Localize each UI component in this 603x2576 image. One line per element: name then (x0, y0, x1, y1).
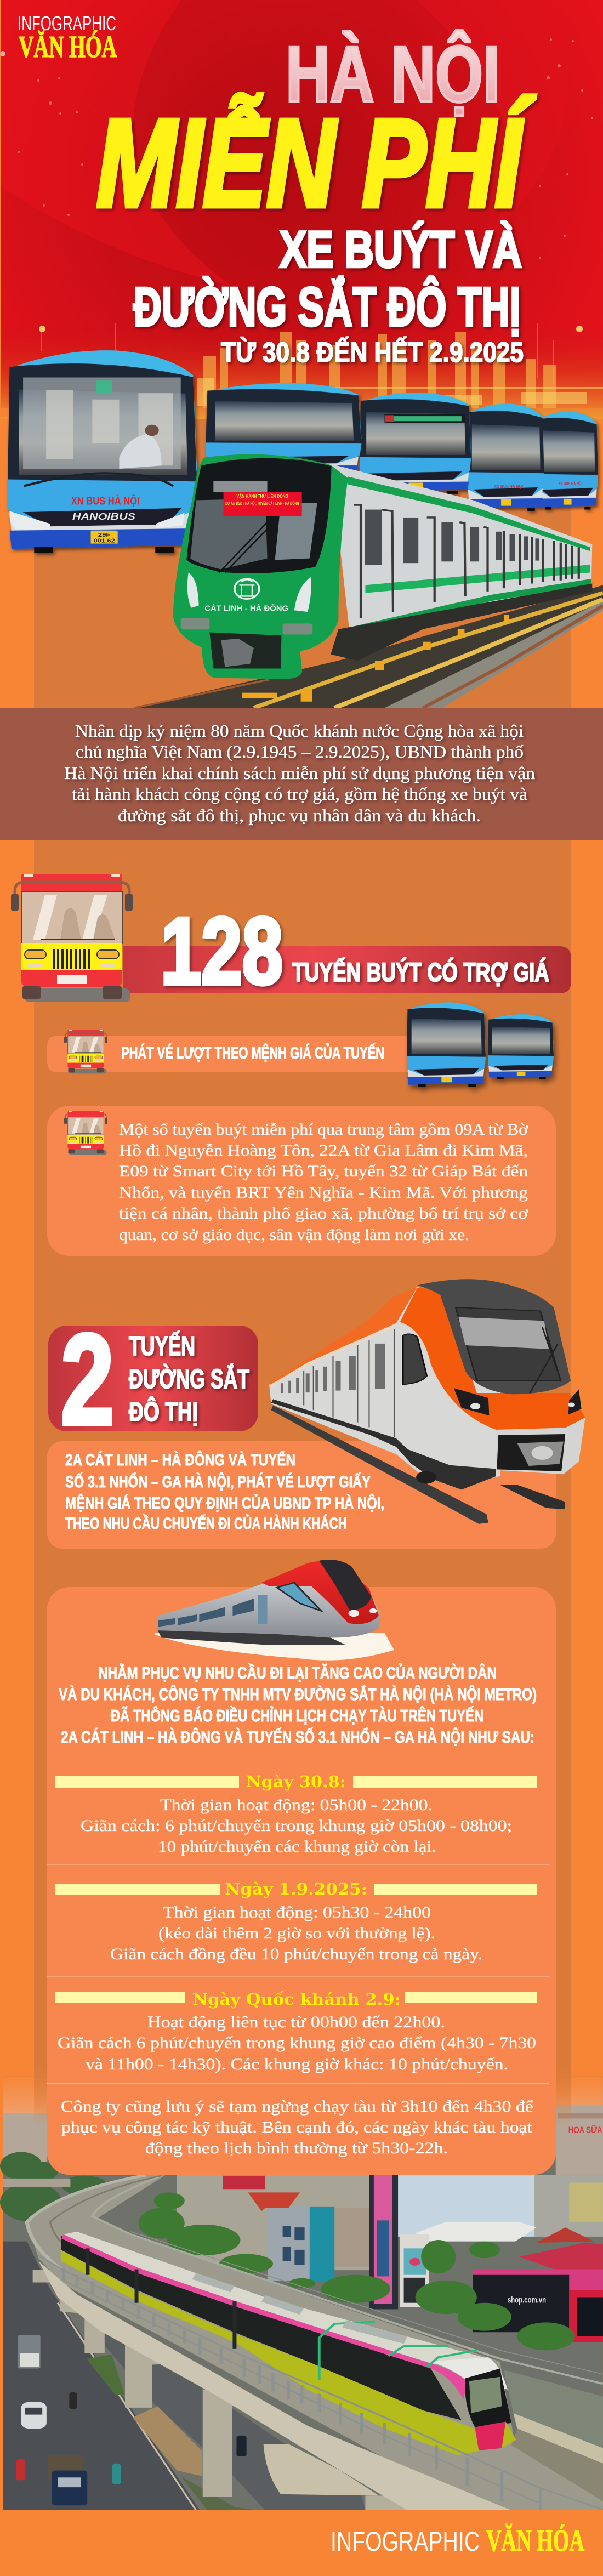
panel: free bus routes: Nhổn, và tuyến BRT Yên Nghĩa - Kim Mã. Với phương (119, 1184, 528, 1202)
panel: ticket note (47, 1030, 428, 1073)
illustration: orange metro train (269, 1279, 585, 1524)
panel: metro lines description: MỆNH GIÁ THEO QUY ĐỊNH CỦA UBND TP HÀ NỘI, (65, 1494, 384, 1512)
badge: 2 metro lines: ĐÔ THỊ (129, 1397, 198, 1427)
subtitle: date range: TỪ 30.8 ĐẾN HẾT 2.9.2025 (221, 336, 524, 368)
hero photo: blue buses: XN BUS HÀ NỘI (559, 481, 582, 486)
hero photo: rail track (135, 585, 603, 708)
intro panel: Nhân dịp kỷ niệm 80 năm Quốc khánh nước Cộng hòa xã hội (75, 721, 524, 741)
yellow and pink metro train (61, 2232, 516, 2455)
intro panel: Hà Nội triển khai chính sách miễn phí sử dụng phương tiện vận (64, 763, 535, 783)
panel: metro lines description (47, 1441, 556, 1549)
panel: free bus routes (47, 1106, 556, 1256)
intro panel: đường sắt đô thị, phục vụ nhân dân và du khách. (118, 805, 481, 825)
schedule: 1.9.2025 (55, 1880, 537, 1963)
panel: metro lines description: 2A CÁT LINH – HÀ ĐÔNG VÀ TUYẾN (65, 1451, 295, 1469)
photo: Hanoi metro on elevated viaduct (0, 2077, 603, 2510)
railing (38, 2255, 603, 2510)
hero photo: green metro train: DỰ ÁN ĐSĐT HÀ NỘI, TUYẾN CÁT LINH - HÀ ĐÔNG (225, 501, 299, 506)
illustration: red metro train (154, 1560, 394, 1661)
schedule: 1.9.2025: Thời gian hoạt động: 05h30 - 24h00 (163, 1903, 431, 1921)
schedule: National Day: Ngày Quốc khánh 2.9: (192, 1990, 401, 2009)
schedule: 30.8 (55, 1772, 537, 1856)
hero photo: blue buses (8, 350, 598, 553)
panel: free bus routes: E09 từ Smart City tới Hồ Tây, tuyến 32 từ Giáp Bát đến (119, 1162, 528, 1180)
inner column (34, 384, 571, 2127)
schedule: National Day (55, 1990, 537, 2073)
road and vehicles (3, 2242, 365, 2510)
hero photo: blue buses: HANOIBUS (72, 512, 135, 522)
hero photo: green metro train: VẬN HÀNH THỬ LIÊN ĐỘNG (236, 493, 288, 499)
banner: 128 bus routes (123, 899, 571, 1004)
panel: free bus routes: quan, cơ sở giáo dục, sân vận động làm nơi gửi xe. (119, 1226, 469, 1244)
schedule: 1.9.2025: Giãn cách đồng đều 10 phút/chuyến trong cả ngày. (110, 1945, 482, 1963)
schedule: National Day: và 11h00 - 14h30). Các khung giờ khác: 10 phút/chuyến. (86, 2055, 508, 2073)
hero photo: blue buses: XN BUS HÀ NỘI (494, 484, 523, 490)
logo: Infographic Văn Hóa: INFOGRAPHIC (18, 12, 116, 35)
photo: two blue buses (407, 1002, 554, 1087)
schedule: 30.8: Giãn cách: 6 phút/chuyến trong khung giờ 05h00 - 08h00; (81, 1817, 512, 1835)
footer bar (0, 2510, 603, 2576)
badge: 2 metro lines (48, 1307, 258, 1452)
panel: metro lines description: SỐ 3.1 NHỔN – GA HÀ NỘI, PHÁT VÉ LƯỢT GIẤY (65, 1472, 371, 1491)
schedule: 1.9.2025: Ngày 1.9.2025: (225, 1880, 367, 1898)
footer logo: INFOGRAPHIC (331, 2526, 480, 2557)
panel: ticket note: PHÁT VÉ LƯỢT THEO MỆNH GIÁ CỦA TUYẾN (121, 1043, 384, 1062)
city skyline (0, 323, 603, 419)
hero photo: blue buses: XN BUS HÀ NỘI (71, 494, 140, 507)
schedule: 1.9.2025: (kéo dài thêm 2 giờ so với thường lệ). (158, 1924, 435, 1942)
panel: metro lines description: THEO NHU CẦU CHUYẾN ĐI CỦA HÀNH KHÁCH (65, 1514, 347, 1533)
intro panel: chủ nghĩa Việt Nam (2.9.1945 – 2.9.2025), UBND thành phố (76, 742, 524, 761)
title: Hà Nội: HÀ NỘI (286, 30, 500, 118)
schedule: 30.8: Ngày 30.8: (246, 1772, 346, 1791)
schedule: technical note: Công ty cũng lưu ý sẽ tạm ngừng chạy tàu từ 3h10 đến 4h30 để (61, 2097, 534, 2116)
panel: free bus routes: Một số tuyến buýt miễn phí qua trung tâm gồm 09A từ Bờ (119, 1121, 528, 1139)
logo: Infographic Văn Hóa (18, 12, 117, 64)
schedule intro text (59, 1663, 537, 1747)
schedule: technical note: động theo lịch bình thường từ 5h30-22h. (145, 2139, 448, 2157)
hero photo: blue buses: 001.62 (93, 538, 115, 544)
banner: 128 bus routes: 128 (161, 899, 283, 1004)
piers (33, 2270, 408, 2510)
footer logo (331, 2523, 584, 2558)
schedule: National Day: Hoạt động liên tục từ 00h00 đến 22h00. (147, 2013, 445, 2031)
panel: metro schedule (47, 1587, 556, 2175)
hero background (0, 0, 603, 408)
schedule: 30.8: 10 phút/chuyến các khung giờ còn lại. (158, 1838, 436, 1856)
panel: free bus routes: tiện cá nhân, thành phố giao xã, phường bố trí trụ sở cơ (119, 1204, 528, 1222)
schedule intro text: ĐÃ THÔNG BÁO ĐIỀU CHỈNH LỊCH CHẠY TÀU TRÊN TUYẾN (111, 1705, 483, 1725)
intro panel: tải hành khách công cộng có trợ giá, gồm hệ thống xe buýt và (72, 784, 527, 804)
schedule: 30.8: Thời gian hoạt động: 05h00 - 22h00. (160, 1796, 433, 1814)
schedule: technical note (61, 2097, 534, 2157)
badge: 2 metro lines: ĐƯỜNG SẮT (129, 1364, 249, 1394)
schedule intro text: NHẰM PHỤC VỤ NHU CẦU ĐI LẠI TĂNG CAO CỦA NGƯỜI DÂN (98, 1663, 497, 1682)
buildings: shop.com.vn (508, 2295, 546, 2305)
panel: free bus routes: Hồ đi Nguyễn Hoàng Tôn, 22A từ Gia Lâm đi Kim Mã, (119, 1141, 528, 1159)
viaduct (27, 2175, 603, 2510)
title: Xe buýt và: XE BUÝT VÀ (280, 220, 522, 278)
hero photo: green metro train: CÁT LINH - HÀ ĐÔNG (204, 604, 288, 613)
badge: 2 metro lines: 2 (61, 1307, 114, 1452)
logo: Infographic Văn Hóa: VĂN HÓA (19, 30, 117, 64)
icon: large red bus (11, 874, 133, 1002)
intro panel (0, 708, 603, 840)
buildings (139, 2175, 603, 2350)
hero photo: blue buses: 29F (98, 532, 110, 538)
schedule: National Day: Giãn cách 6 phút/chuyến trong khung giờ cao điểm (4h30 - 7h30 (58, 2034, 536, 2052)
schedule: technical note: phục vụ công tác kỹ thuật. Bên cạnh đó, các ngày khác tàu hoạt (61, 2118, 533, 2136)
hero photo: green metro train (173, 454, 592, 679)
badge: 2 metro lines: TUYẾN (129, 1332, 195, 1361)
